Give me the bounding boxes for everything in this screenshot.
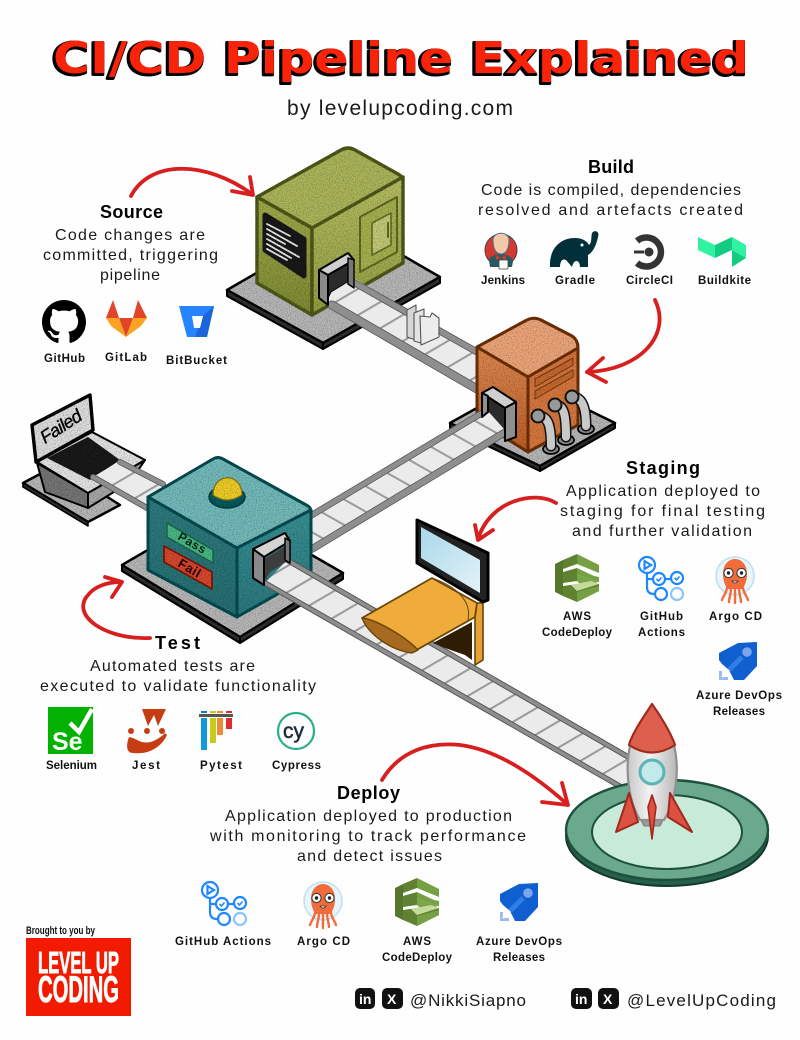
arrow: test	[83, 577, 150, 638]
failed label: Failed	[36, 405, 87, 447]
build pipes	[532, 390, 594, 454]
staging gate	[362, 520, 488, 665]
section: test	[40, 633, 316, 695]
icon: jenkins: Jenkins	[481, 275, 525, 287]
arrow: staging	[475, 498, 556, 540]
test door	[253, 533, 290, 585]
icon: azure devops (deploy)	[476, 883, 562, 964]
staging monitor	[417, 520, 488, 602]
brand logo	[26, 925, 131, 1016]
section: deploy: with monitoring to track performance	[209, 828, 526, 845]
social: level up coding: @LevelUpCoding	[627, 991, 776, 1010]
launch platform	[566, 780, 768, 886]
section: test: Automated tests are	[90, 658, 255, 675]
icon: aws codedeploy (deploy): AWS	[403, 936, 431, 948]
social: nikki: X	[387, 991, 397, 1007]
section: deploy: and detect issues	[297, 848, 442, 865]
arrow: deploy	[382, 744, 568, 805]
icon: cypress: cy	[283, 720, 304, 743]
build vents	[535, 358, 573, 399]
source door panel	[360, 197, 397, 272]
pass sign	[167, 523, 213, 563]
icon: github	[42, 300, 86, 365]
icon: github actions (staging): Actions	[638, 627, 685, 639]
icon: azure devops (staging): Releases	[713, 706, 765, 718]
icon: azure devops (deploy): Azure DevOps	[476, 936, 562, 948]
machine: build	[450, 318, 615, 471]
machine: test	[122, 458, 343, 643]
brand logo: Brought to you by	[26, 925, 96, 937]
section: staging: Application deployed to	[566, 483, 760, 500]
icon: gitlab: GitLab	[105, 352, 147, 364]
icon: azure devops (staging)	[696, 642, 782, 718]
icon: github actions (staging)	[638, 557, 685, 639]
social: level up coding: in	[575, 991, 587, 1007]
icon: gitlab	[105, 300, 147, 364]
section: build	[478, 157, 743, 219]
section: staging: Staging	[626, 458, 700, 478]
section: test: executed to validate functionality	[40, 678, 316, 695]
pass sign: Pass	[176, 529, 209, 557]
icon: github: GitHub	[44, 353, 85, 365]
section: deploy: Deploy	[337, 783, 400, 803]
status light	[209, 478, 245, 508]
icon: circleci	[626, 238, 673, 287]
icon: buildkite	[698, 237, 751, 287]
conveyor: test to failed bin	[93, 462, 163, 508]
section: build: Code is compiled, dependencies	[481, 182, 741, 199]
social: nikki: @NikkiSiapno	[410, 991, 526, 1010]
icon: aws codedeploy (staging): AWS	[563, 611, 591, 623]
icon: argo cd (deploy): Argo CD	[297, 936, 350, 948]
fail sign: Fail	[176, 556, 204, 581]
icon: pytest	[199, 711, 242, 772]
icon: circleci: CircleCI	[626, 275, 673, 287]
section: source: Source	[100, 202, 163, 222]
icon: gradle: Gradle	[555, 275, 595, 287]
conveyor: build to test	[312, 408, 510, 550]
social: level up coding	[571, 988, 776, 1010]
machine: source	[227, 148, 440, 349]
arrow: build	[587, 300, 660, 382]
section: staging: and further validation	[572, 523, 752, 540]
icon: jenkins	[481, 233, 525, 287]
icon: selenium	[46, 707, 97, 772]
icon: aws codedeploy (deploy)	[382, 878, 453, 964]
icon: azure devops (deploy): Releases	[493, 952, 545, 964]
icon: bitbucket: BitBucket	[166, 355, 227, 367]
section: staging: staging for final testing	[560, 503, 765, 520]
section: source: pipeline	[100, 267, 160, 284]
section: test: Test	[155, 633, 200, 653]
social: nikki: in	[359, 991, 371, 1007]
subtitle: by levelupcoding.com	[287, 97, 513, 120]
icon: aws codedeploy (deploy): CodeDeploy	[382, 952, 453, 964]
social: nikki	[355, 988, 526, 1010]
icon: bitbucket	[166, 306, 227, 367]
arrow: source	[131, 169, 253, 196]
icon: cypress: Cypress	[272, 760, 321, 772]
section: staging	[560, 458, 765, 540]
source door	[319, 253, 354, 305]
icon: azure devops (staging): Azure DevOps	[696, 690, 782, 702]
build door	[482, 387, 516, 441]
icon: selenium: Selenium	[46, 760, 97, 772]
fail sign	[164, 546, 212, 589]
brand logo: LEVEL UP	[38, 945, 119, 980]
icon: cypress	[272, 713, 321, 772]
icon: jest: Jest	[132, 760, 160, 772]
section: build: Build	[588, 157, 634, 177]
icon: gradle	[550, 231, 598, 287]
icon: argo cd (staging)	[709, 557, 762, 623]
icon: github actions (deploy): GitHub Actions	[175, 936, 271, 948]
social: level up coding: X	[603, 991, 613, 1007]
icon: argo cd (deploy)	[297, 882, 350, 948]
brand logo: CODING	[38, 969, 119, 1010]
section: deploy	[209, 783, 526, 865]
icon: github actions (deploy)	[175, 882, 271, 948]
icon: aws codedeploy (staging)	[542, 554, 613, 639]
icon: pytest: Pytest	[200, 760, 242, 772]
icon: buildkite: Buildkite	[698, 275, 751, 287]
source screen	[265, 215, 304, 276]
section: source	[43, 202, 218, 284]
icon: aws codedeploy (staging): CodeDeploy	[542, 627, 613, 639]
icon: jest	[127, 709, 167, 772]
title: CI/CD Pipeline Explained	[52, 34, 748, 86]
icon: selenium: Se	[52, 728, 83, 756]
documents on belt	[407, 305, 439, 345]
section: build: resolved and artefacts created	[478, 202, 743, 219]
conveyor: source to build	[326, 270, 477, 389]
section: source: committed, triggering	[43, 247, 218, 264]
icon: github actions (staging): GitHub	[640, 611, 683, 623]
failed bin	[23, 395, 145, 526]
title: CI/CD Pipeline Explained	[53, 33, 749, 84]
section: source: Code changes are	[55, 227, 205, 244]
conveyor: test to rocket	[265, 560, 630, 792]
icon: argo cd (staging): Argo CD	[709, 611, 762, 623]
rocket	[616, 704, 692, 839]
section: deploy: Application deployed to production	[225, 808, 512, 825]
